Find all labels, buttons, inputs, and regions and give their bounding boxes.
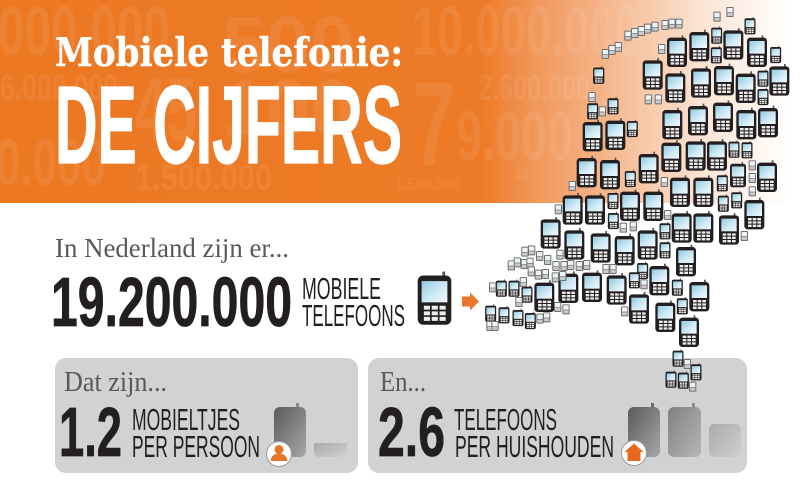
title: De cijfers: DE CIJFERS <box>55 64 402 187</box>
background numbers: 45 <box>515 165 529 184</box>
background numbers: 9.000 <box>456 97 573 175</box>
map of the Netherlands made of phones <box>485 7 789 392</box>
label: telefoons per huishouden <box>454 402 614 464</box>
label: mobieltjes per persoon <box>132 402 260 464</box>
label: mobiele telefoons: TELEFOONS <box>302 298 405 333</box>
background numbers: 100 <box>222 63 354 152</box>
number: 2.6: 2.6 <box>378 393 445 471</box>
background numbers: 2.600.000 <box>478 67 590 108</box>
background numbers: 0.000 <box>0 125 106 199</box>
label: mobiele telefoons <box>302 271 405 333</box>
panel: per huishouden <box>368 358 747 473</box>
intro text: In Nederland zijn er... <box>55 233 289 263</box>
background numbers: 1.500.000 <box>135 157 272 198</box>
text: en: En... <box>380 366 426 398</box>
icon: grey phone <box>274 403 306 457</box>
background numbers: 7 <box>413 57 455 191</box>
icon: phone fraction <box>314 443 347 457</box>
number: 1.2: 1.2 <box>59 393 122 471</box>
label: telefoons per huishouden: TELEFOONS <box>454 402 557 437</box>
icon: person <box>266 442 292 466</box>
icon: house <box>622 440 646 466</box>
background numbers: 6.000.000 <box>0 67 118 108</box>
icon: grey phones <box>628 403 741 457</box>
background numbers: 45 <box>135 60 197 160</box>
panel: per persoon <box>55 358 358 473</box>
header banner <box>0 0 800 203</box>
big number: 19.200.000 <box>51 263 292 341</box>
background numbers: 500 <box>222 0 354 89</box>
arrow <box>462 292 479 310</box>
label: mobieltjes per persoon: MOBIELTJES <box>132 402 240 437</box>
label: telefoons per huishouden: PER HUISHOUDEN <box>455 429 614 464</box>
background numbers <box>0 0 640 199</box>
label: mobiele telefoons: MOBIELE <box>302 271 381 306</box>
title: Mobiele telefonie: Mobiele telefonie: <box>55 30 403 76</box>
background numbers: 1.500.000 <box>395 175 460 194</box>
label: mobieltjes per persoon: PER PERSOON <box>132 429 260 464</box>
icon: mobile phone <box>418 272 451 325</box>
text: dat zijn: Dat zijn... <box>64 366 167 398</box>
